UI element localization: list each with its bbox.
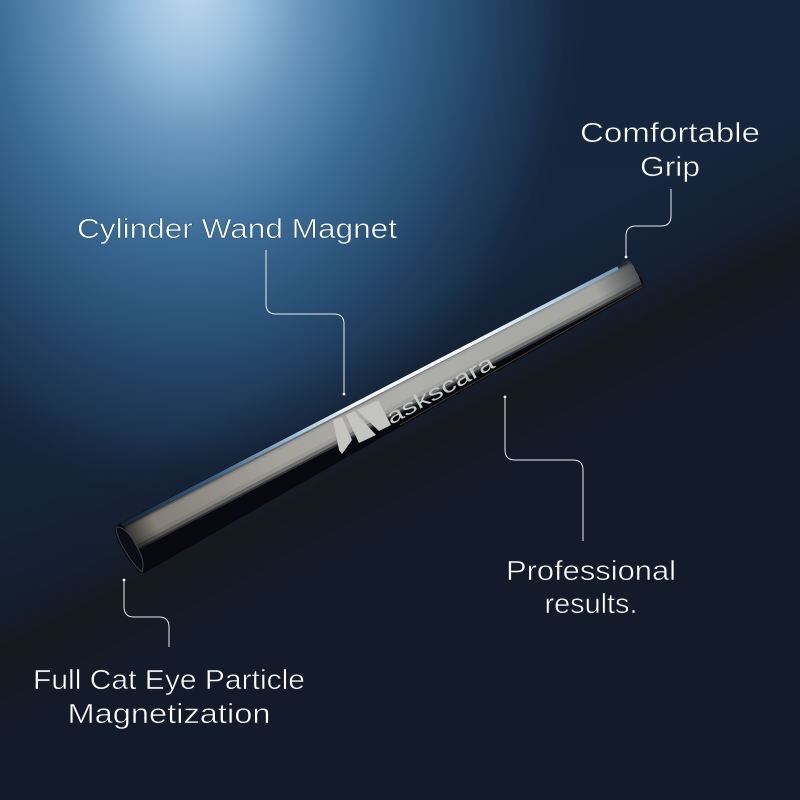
logo mark bbox=[333, 400, 391, 454]
logo wordmark: askscara bbox=[382, 351, 499, 429]
callout: cylinder wand magnet: Cylinder Wand Magnet bbox=[77, 213, 397, 244]
magnet wand bbox=[114, 263, 643, 573]
callout: comfortable grip: Comfortable bbox=[580, 117, 760, 148]
wand silver band bbox=[130, 271, 636, 538]
callout: full cat eye particle magnetization: Full Cat Eye Particle bbox=[33, 664, 305, 695]
callout: comfortable grip: Grip bbox=[640, 151, 700, 182]
wand body bbox=[114, 263, 643, 573]
wand end cap bbox=[116, 527, 143, 572]
callout: professional results: Professional bbox=[506, 555, 676, 586]
wand highlight bbox=[122, 268, 618, 525]
wand copper edge bbox=[400, 287, 642, 425]
callout: full cat eye particle magnetization: Magnetization bbox=[68, 698, 270, 729]
callout: full cat eye particle magnetization bbox=[33, 579, 305, 729]
callout: comfortable grip bbox=[580, 117, 760, 258]
callout: professional results bbox=[504, 396, 676, 619]
callout: cylinder wand magnet bbox=[77, 213, 397, 395]
callout: professional results: results. bbox=[544, 588, 638, 619]
